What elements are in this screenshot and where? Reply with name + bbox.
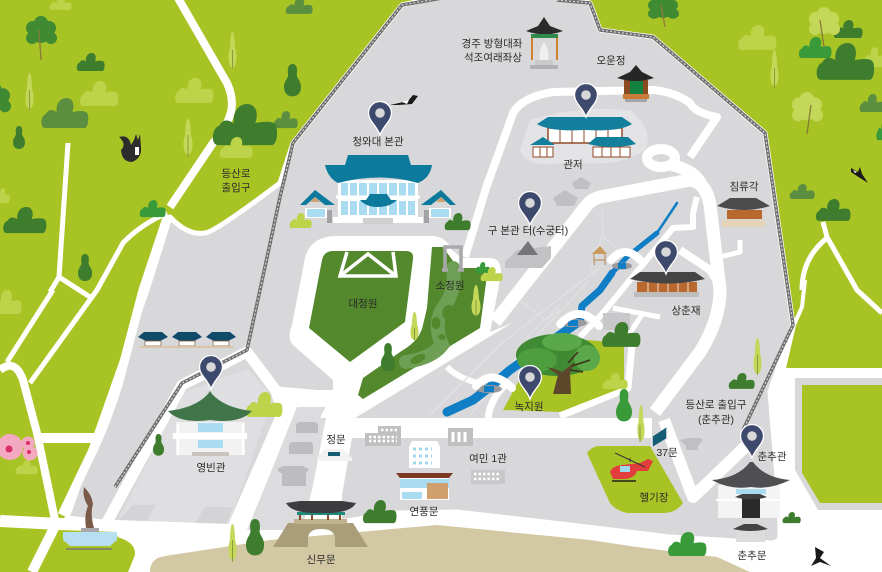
palace roads (107, 90, 745, 522)
label: Sinmumun: 신무문 (307, 554, 336, 566)
bridges (476, 252, 640, 388)
white road base: south and east (115, 325, 882, 572)
gate 37 (652, 427, 667, 447)
label: Chimnyugak: 침류각 (730, 181, 759, 193)
magpie in flight (851, 167, 868, 183)
map pin: Chunchugwan (740, 424, 764, 458)
label: Buddha statue line 2: 석조여래좌상 (464, 52, 522, 64)
gazebo (592, 246, 607, 265)
grey outbuildings near the residence (553, 177, 591, 206)
label: Ounjeong: 오운정 (597, 55, 625, 67)
garden gate (442, 247, 464, 270)
stream (447, 203, 677, 412)
bottom-left green patch (42, 533, 135, 572)
map pin: main office (368, 102, 392, 135)
label: Sangchunjae: 상춘재 (672, 305, 700, 317)
stream under bridges (484, 263, 626, 392)
grey administrative building (365, 426, 401, 446)
label: Nokjiwon: 녹지원 (515, 401, 543, 413)
map pin: old main hall site (518, 192, 542, 225)
building: Chimnyugak (717, 198, 770, 227)
tall slender pale trees (25, 32, 779, 562)
building: Chunchugwan (712, 462, 790, 518)
label: hiking entrance: 등산로 (222, 168, 251, 180)
label: grand lawn: 대정원 (349, 298, 377, 310)
building: Buddha pavilion (526, 17, 563, 69)
building: presidential residence (530, 117, 636, 157)
heliport pad (587, 446, 683, 513)
pale bush by the trail (220, 137, 253, 158)
three small guesthouses (138, 332, 236, 348)
residence halo (520, 109, 648, 164)
label: Chunchugwan: 춘추관 (758, 451, 787, 463)
helicopter on the pad (610, 453, 653, 481)
building: main gate Jeongmun (317, 449, 352, 461)
label: residence: 관저 (563, 159, 583, 171)
label: main office: 청와대 본관 (352, 136, 404, 148)
Nokjiwon lawn (503, 340, 624, 412)
palace wall (115, 0, 793, 487)
bright green bushes (140, 37, 882, 556)
paved lot patches (117, 505, 233, 536)
grey wedge between gate road (247, 407, 328, 530)
grand lawn (309, 251, 413, 362)
grey gate-side buildings (277, 422, 318, 486)
building: Sangchunjae (630, 272, 705, 297)
round-crowned trees (0, 0, 840, 134)
label: Buddha statue: 경주 방형대좌 (462, 37, 523, 50)
building: Chunchumun gate (733, 524, 768, 542)
squirrel (119, 134, 141, 162)
label: Yeonpungmun: 연풍문 (410, 506, 439, 518)
guest house lot (117, 369, 273, 530)
grand lawn frame (340, 252, 396, 276)
garden stone path (406, 268, 456, 366)
white road band around the lawns (290, 236, 512, 418)
central east-west road (345, 418, 652, 438)
sand foreground (150, 525, 750, 572)
grey palace compound (67, 0, 793, 543)
statue and fountain (63, 487, 117, 549)
label: old main hall: 구 본관 터(수궁터) (488, 225, 568, 237)
Yeomin hall 1 grey building (471, 470, 505, 484)
grey small building near gate 37 (680, 438, 703, 450)
map pin: Nokjiwon (518, 366, 542, 399)
map pin: Sangchunjae (654, 240, 678, 274)
map pin: residence (574, 84, 598, 117)
pale bush by the garden (481, 267, 503, 281)
Sojeongwon garden (358, 247, 488, 399)
gourd-shaped trees (13, 64, 632, 555)
label: heliport: 헬기장 (640, 492, 669, 504)
flowers (0, 434, 38, 460)
label: gate 37: 37문 (656, 447, 678, 459)
white office building (409, 441, 440, 468)
building: main office Cheong Wa Dae (300, 155, 456, 224)
big pine tree at Nokjiwon (516, 333, 600, 394)
paved yard behind the lawn (603, 313, 630, 330)
label: trail entrance: 등산로 출입구 (686, 398, 747, 411)
old main hall site monument (505, 241, 551, 268)
map pin: Yeongbingwan (200, 356, 222, 389)
label: Chunchumun: 춘추문 (738, 550, 767, 562)
label: hiking entrance line 2: 출입구 (222, 181, 251, 194)
bridge undersides (476, 262, 632, 393)
label: main gate: 정문 (326, 434, 346, 446)
building: Yeonpungmun (396, 473, 453, 500)
right green lot frame (795, 378, 882, 510)
building: Yeongbingwan (168, 391, 252, 456)
right green lot (802, 385, 882, 503)
small black bird figure (811, 547, 831, 566)
mid green bushes (41, 0, 882, 199)
label: trail entrance line 2: (춘추관) (698, 414, 734, 426)
label: Sojeongwon: 소정원 (436, 280, 464, 292)
magpie (390, 95, 418, 105)
label: Yeongbingwan: 영빈관 (197, 462, 226, 474)
Yeomin hall 2 grey building (448, 428, 473, 446)
building: Sinmumun gate (273, 501, 368, 547)
west and gate road (225, 390, 352, 535)
label: Yeomin hall 1: 여민 1관 (469, 453, 507, 465)
building: Ounjeong pavilion (617, 65, 654, 102)
